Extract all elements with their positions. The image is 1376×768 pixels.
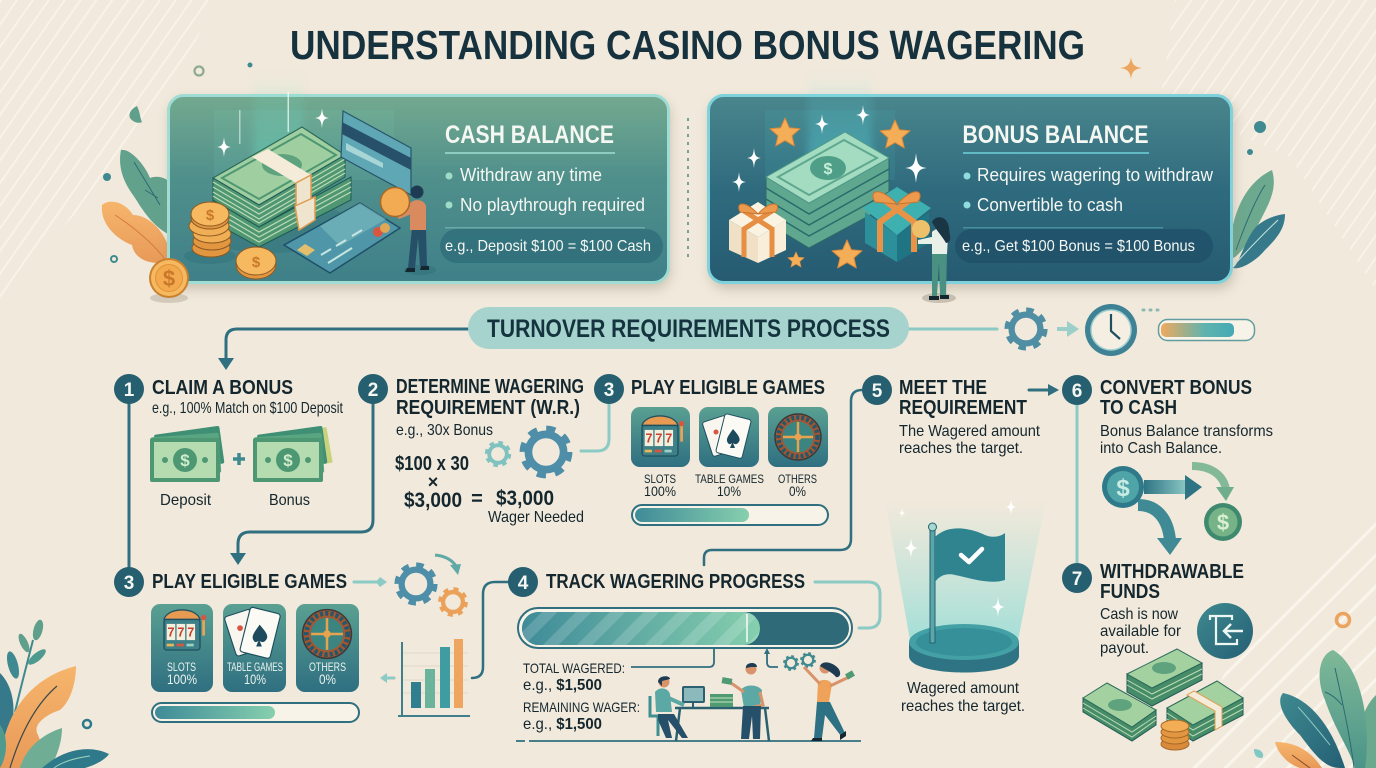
decor: left leaves beside cash panel [102,106,170,263]
icon: conversion arrows [1138,466,1234,555]
illustration: woman with coin [912,217,956,303]
bullets: cash [446,165,645,215]
tile: others: 0% [319,671,336,687]
badge 1 [114,374,144,404]
formula: × [428,472,438,492]
sparkles [217,92,329,157]
standing man [722,663,763,739]
description: Cash is now [1100,606,1178,623]
icon: clock [1085,304,1137,356]
step 3 lower [114,567,359,722]
bullets: bonus: Requires wagering to withdraw [977,165,1214,185]
description [1100,606,1182,657]
icon: deposit bills [150,426,224,482]
step 6 [1062,375,1273,555]
arrow: step 5 to step 6 [1029,384,1059,396]
heading [1100,377,1252,419]
heading: CLAIM A BONUS [152,377,293,399]
illustration: cash piles [1083,649,1243,750]
panel: bonus balance [708,72,1234,303]
heading [899,377,1027,419]
badge 3 [114,567,144,597]
sparkles [732,105,926,192]
icon: green coin: $ [1217,510,1229,535]
wagering progress bar [518,608,852,648]
progress bar [632,505,828,525]
bullets: bonus [964,165,1214,215]
note: e.g., 100% Match on $100 Deposit [152,400,343,417]
section banner: turnover requirements process: TURNOVER REQUIREMENTS PROCESS [487,315,890,343]
heading: WITHDRAWABLE [1100,561,1244,583]
icon: dots [1143,308,1158,312]
icon: green coin [1204,503,1242,541]
tile labels: 10% [717,483,741,499]
description: The Wagered amount [899,423,1041,440]
title: UNDERSTANDING CASINO BONUS WAGERING [290,22,1085,68]
example pill: cash [440,227,663,263]
tile: others [296,604,359,692]
illustration: white gift [729,202,786,263]
example pill: bonus: e.g., Get $100 Bonus = $100 Bonus [962,238,1195,255]
illustration: upright credit card [341,111,411,195]
tile: table games [223,604,286,692]
flag pole [928,523,936,643]
badge 4: 4 [518,573,529,594]
heading: FUNDS [1100,581,1160,603]
glow beam [765,72,895,202]
section banner: turnover requirements process [468,307,909,349]
illustration: bonus cash stack [766,132,889,248]
heading: DETERMINE WAGERING [396,376,584,398]
illustration: coins: $ [206,207,215,224]
connector: step 2 to play games [230,404,373,565]
step 1 [114,374,343,509]
illustration: teal gift [863,187,931,262]
tile labels: SLOTS [644,472,676,486]
sparkles [898,499,1017,617]
back stack [1127,649,1202,706]
tile: others [768,407,828,467]
illustration: team [650,653,855,741]
arrow to clock [1057,321,1079,337]
tile labels: OTHERS [778,472,817,486]
connector: step 4 to step 5 [704,390,862,565]
description: into Cash Balance. [1100,440,1222,457]
left stack [1083,683,1156,741]
desk [675,708,769,741]
plus sign [233,453,245,465]
arrow to gears [354,577,387,587]
arrow left of chart [380,673,394,683]
icon: bonus bills [253,426,333,482]
monitor [682,686,705,708]
caption [901,680,1025,715]
decor: bottom right plants [1254,614,1376,768]
illustration: flag on platform [885,499,1046,672]
description: Bonus Balance transforms [1100,423,1273,440]
badge 3: 3 [604,380,614,401]
total and remaining text: e.g., $1,500 [523,677,602,694]
illustration: cash stack [192,127,351,253]
flag [935,528,1005,582]
formula: $100 x 30 [395,453,469,475]
heading: CONVERT BONUS [1100,377,1252,399]
step 7 [1062,561,1253,750]
cash pile [710,694,733,707]
connector: chart to step 4 [472,582,508,678]
badge 7: 7 [1072,569,1082,590]
bullets: bonus: Convertible to cash [977,195,1123,215]
icon: teal coin: $ [1116,475,1130,502]
note: e.g., 30x Bonus [396,422,493,439]
heading: REQUIREMENT (W.R.) [396,397,580,419]
ground line [516,740,861,742]
description [1100,423,1273,457]
badge 2: 2 [368,380,378,401]
chart: bars [398,639,470,716]
icon: gears [397,555,466,615]
tile: slots [151,604,213,692]
icon: teal coin [1102,466,1144,508]
heading underline [445,152,615,154]
tile labels: 100% [644,483,676,499]
formula [395,453,584,526]
label bonus: Bonus [269,492,310,509]
illustration: man holding coin [380,186,436,275]
description: available for [1100,623,1182,640]
panel: cash balance [168,72,670,289]
badge 1: 1 [124,380,135,401]
total and remaining text: TOTAL WAGERED: [523,660,625,676]
heading [1100,561,1244,603]
illustration: coins [184,202,276,279]
decor: bottom left plants [0,619,109,768]
total and remaining text [523,660,640,733]
step 2 [358,374,584,526]
illustration: flat credit card [284,203,400,273]
icon: withdraw [1197,603,1253,659]
badge 7 [1062,563,1092,593]
badge 3 [594,374,624,404]
formula: Wager Needed [488,509,584,526]
heading: cash balance: CASH BALANCE [445,121,614,149]
example pill: bonus [955,227,1213,263]
icon: gear [1007,310,1045,348]
badge 6: 6 [1072,381,1082,402]
illustration: coins: $ [252,254,261,271]
flag check [961,549,982,562]
coin pile [1161,720,1189,750]
decor: right leaves beside bonus panel [1233,121,1285,268]
heading: TO CASH [1100,397,1177,419]
heading: PLAY ELIGIBLE GAMES [631,377,825,399]
caption: reaches the target. [901,698,1025,715]
description [899,423,1041,457]
icon: mini progress bar [1158,320,1254,340]
woman [804,662,855,741]
caption: Wagered amount [907,680,1020,697]
tile labels: 0% [789,483,806,499]
description: payout. [1100,640,1149,657]
heading: bonus balance: BONUS BALANCE [962,121,1148,149]
badge 5 [862,375,892,405]
decor: top dots and sparkle [194,57,1142,262]
callout line remaining [764,648,778,667]
description: reaches the target. [899,440,1023,457]
tile: table games [699,407,759,467]
badge 4 [508,567,538,597]
seated man [650,676,688,738]
icon: small gear [486,442,510,466]
heading [396,376,584,419]
connector: step 1 to step 3 [128,404,130,568]
tile: table games: 10% [244,671,266,687]
tile: slots [631,407,690,467]
heading underline [963,152,1149,154]
step 5 [862,375,1046,715]
tile: others: OTHERS [309,660,346,674]
heading: REQUIREMENT [899,397,1027,419]
badge 3: 3 [124,573,134,594]
bullets: cash: No playthrough required [460,195,645,215]
connector: gear to step 3 [581,404,609,451]
formula: $3,000 [404,489,462,512]
formula: $3,000 [496,487,554,510]
connector to gear [909,328,997,330]
glow beam [214,72,394,202]
bullets: cash: Withdraw any time [460,165,602,185]
connector: step 6 to step 7 [1076,405,1078,565]
tile: slots: 100% [167,671,197,687]
badge 2 [358,374,388,404]
formula: = [471,488,483,510]
small gears [784,653,815,670]
example pill: cash: e.g., Deposit $100 = $100 Cash [445,238,651,255]
illustration: stars [770,118,910,268]
badge 6 [1062,375,1092,405]
heading: TRACK WAGERING PROGRESS [546,571,805,593]
illustration: bonus cash stack: $ [824,161,833,178]
step 4 [508,567,880,741]
tile labels: TABLE GAMES [695,472,764,486]
right stack [1167,681,1243,741]
step 3 top [594,374,828,525]
icon: big gear [523,429,569,475]
tile labels [644,472,817,499]
section banner arrow left [218,329,468,370]
connector: heading to bar [815,582,880,628]
platform [909,624,1019,672]
light beam [885,500,1046,640]
label deposit: Deposit [160,492,212,509]
tile: table games: TABLE GAMES [227,660,283,674]
tile: slots: SLOTS [167,660,196,674]
heading: PLAY ELIGIBLE GAMES [152,571,347,593]
heading: MEET THE [899,377,987,399]
callout line total [631,649,714,667]
progress bar [152,703,359,722]
total and remaining text: e.g., $1,500 [523,716,602,733]
badge 5: 5 [872,381,883,402]
decor: coin at panel corner [149,258,189,303]
total and remaining text: REMAINING WAGER: [523,699,640,715]
